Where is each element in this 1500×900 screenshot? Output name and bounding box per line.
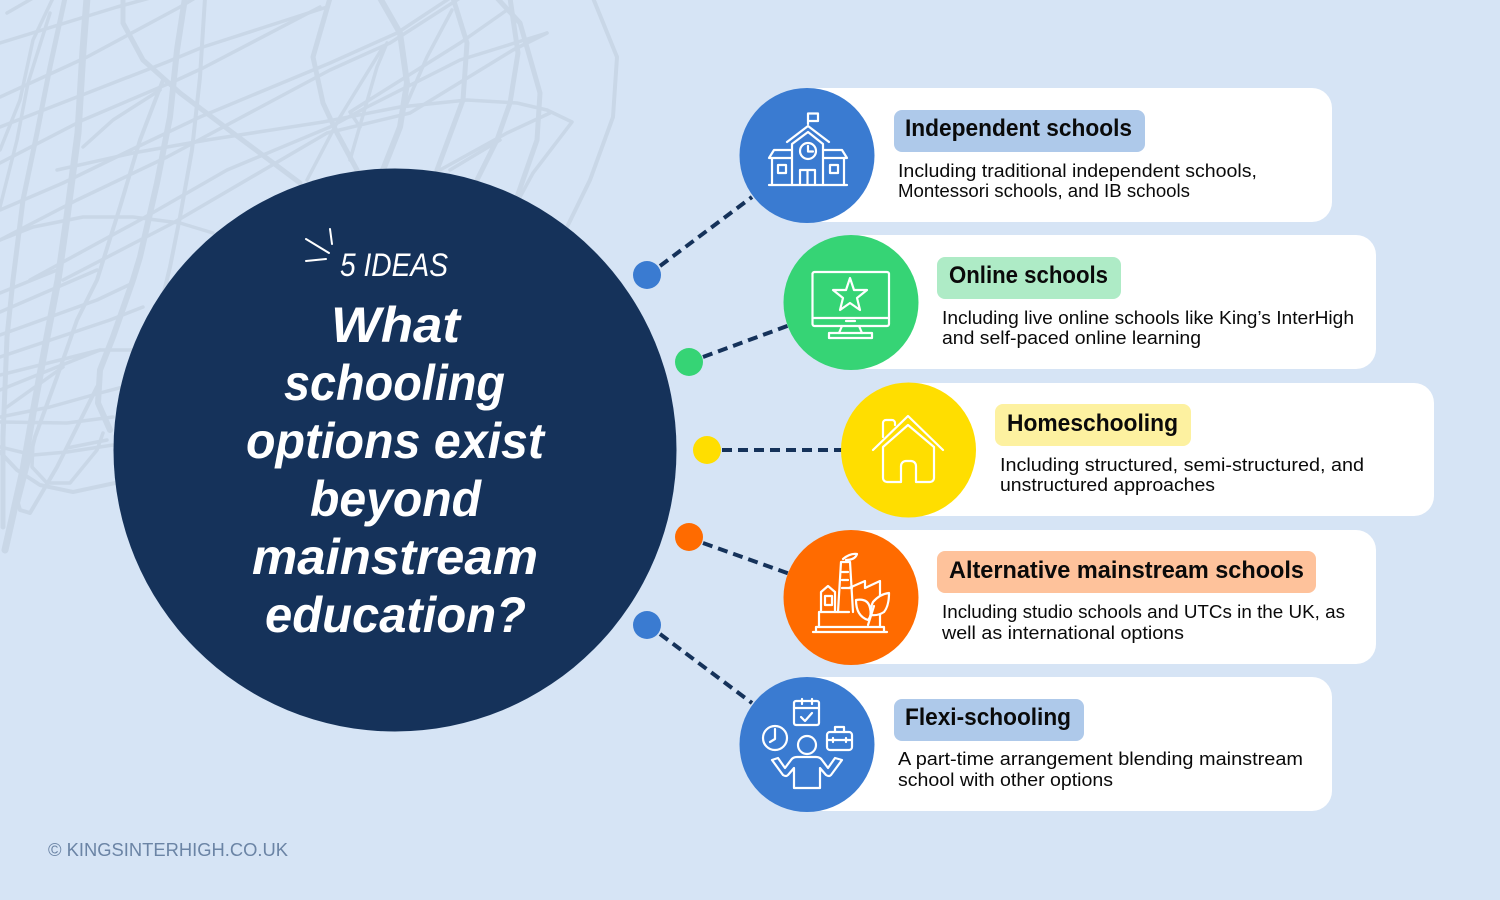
description: [898, 161, 1257, 201]
title: beyond: [310, 471, 482, 527]
description: Including studio schools and UTCs in the UK, as: [942, 602, 1345, 622]
title: [246, 297, 546, 643]
eyebrow: 5 ideas: 5 IDEAS: [340, 247, 448, 283]
pill heading: Homeschooling: [1007, 410, 1178, 437]
pill heading: Alternative mainstream schools: [949, 557, 1304, 584]
panel: online schools: [784, 235, 1376, 370]
pill heading: Online schools: [949, 262, 1108, 289]
description: [941, 602, 1345, 643]
pill heading: Independent schools: [905, 115, 1132, 142]
pill heading: [995, 404, 1191, 446]
description: Including traditional independent schools,: [898, 161, 1257, 181]
panel: homeschooling: [841, 382, 1434, 518]
connector 2: [675, 325, 790, 376]
central circle with title: [114, 168, 676, 732]
description: [898, 749, 1303, 790]
pill heading: [937, 257, 1121, 299]
title: education?: [265, 587, 526, 643]
copyright footer: © KINGSINTERHIGH.CO.UK: [48, 840, 288, 860]
panel: alternative mainstream schools: [784, 530, 1376, 665]
description: Montessori schools, and IB schools: [898, 181, 1190, 201]
icon: house: [873, 416, 943, 482]
icon: factory with leaves: [813, 554, 889, 632]
eyebrow: 5 ideas: [306, 229, 448, 283]
description: and self-paced online learning: [942, 328, 1201, 348]
pill heading: [894, 699, 1084, 741]
icon: person juggling calendar, clock, briefcase: [763, 699, 852, 788]
description: Including live online schools like King’s InterHigh: [942, 308, 1354, 328]
description: unstructured approaches: [1000, 475, 1215, 495]
title: mainstream: [252, 529, 538, 585]
connector 4: [675, 523, 790, 574]
panel: independent schools: [740, 88, 1332, 223]
pill heading: [894, 110, 1145, 152]
connector 3: [693, 436, 842, 464]
description: well as international options: [941, 623, 1184, 643]
panel: flexi-schooling: [740, 677, 1332, 812]
connector 1: [633, 197, 752, 289]
icon: school: [769, 114, 847, 185]
connector 5: [633, 611, 752, 703]
title: options exist: [246, 413, 546, 469]
description: Including structured, semi-structured, and: [1000, 455, 1364, 475]
description: [942, 308, 1354, 348]
title: schooling: [284, 355, 505, 411]
pill heading: [937, 551, 1316, 593]
pill heading: Flexi-schooling: [905, 704, 1071, 731]
description: [1000, 455, 1364, 495]
title: What: [331, 297, 462, 353]
icon: monitor with star: [812, 272, 889, 338]
description: school with other options: [898, 770, 1113, 790]
description: A part-time arrangement blending mainstream: [898, 749, 1303, 769]
